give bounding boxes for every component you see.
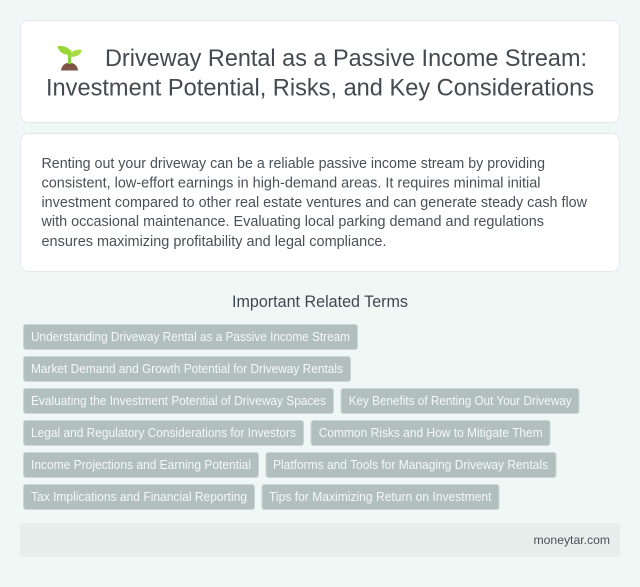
tag: Understanding Driveway Rental as a Passive Income Stream — [31, 330, 350, 344]
summary line 4: with occasional maintenance. Evaluating local parking demand and regulations — [41, 213, 544, 230]
tag — [266, 452, 556, 478]
icon: seedling — [58, 46, 82, 70]
tag — [341, 388, 579, 414]
panel: summary card — [20, 134, 620, 272]
tag — [262, 484, 499, 510]
footer site name: moneytar.com — [534, 533, 610, 547]
footer bar — [20, 523, 620, 557]
tag — [311, 420, 550, 446]
tag list — [24, 324, 579, 510]
tag: Platforms and Tools for Managing Driveway Rentals — [273, 458, 548, 472]
panel: title card — [20, 20, 620, 122]
tag: Evaluating the Investment Potential of Driveway Spaces — [31, 394, 326, 408]
tag: Tips for Maximizing Return on Investment — [269, 490, 492, 504]
summary line 2: consistent, low-effort earnings in high-demand areas. It requires minimal initial — [42, 174, 540, 192]
tag: Tax Implications and Financial Reporting — [31, 490, 247, 504]
title line 1: Driveway Rental as a Passive Income Stream: — [105, 45, 587, 72]
tag: Key Benefits of Renting Out Your Driveway — [349, 394, 572, 408]
tag: Income Projections and Earning Potential — [31, 458, 251, 472]
summary line 1: Renting out your driveway can be a reliable passive income stream by providing — [42, 155, 545, 172]
tag — [24, 420, 304, 446]
summary line 3: investment compared to other real estate ventures and can generate steady cash flow — [42, 194, 587, 211]
tag — [24, 484, 254, 510]
tag — [24, 452, 258, 478]
tag: Legal and Regulatory Considerations for Investors — [31, 426, 296, 440]
tag — [24, 356, 350, 382]
tag — [24, 324, 358, 350]
tag: Common Risks and How to Mitigate Them — [319, 426, 543, 440]
title line 2: Investment Potential, Risks, and Key Considerations — [46, 74, 594, 102]
tag: Market Demand and Growth Potential for Driveway Rentals — [31, 362, 343, 376]
tag — [24, 388, 334, 414]
heading: important related terms: Important Related Terms — [232, 293, 408, 311]
summary line 5: ensures maximizing profitability and legal compliance. — [42, 233, 386, 250]
